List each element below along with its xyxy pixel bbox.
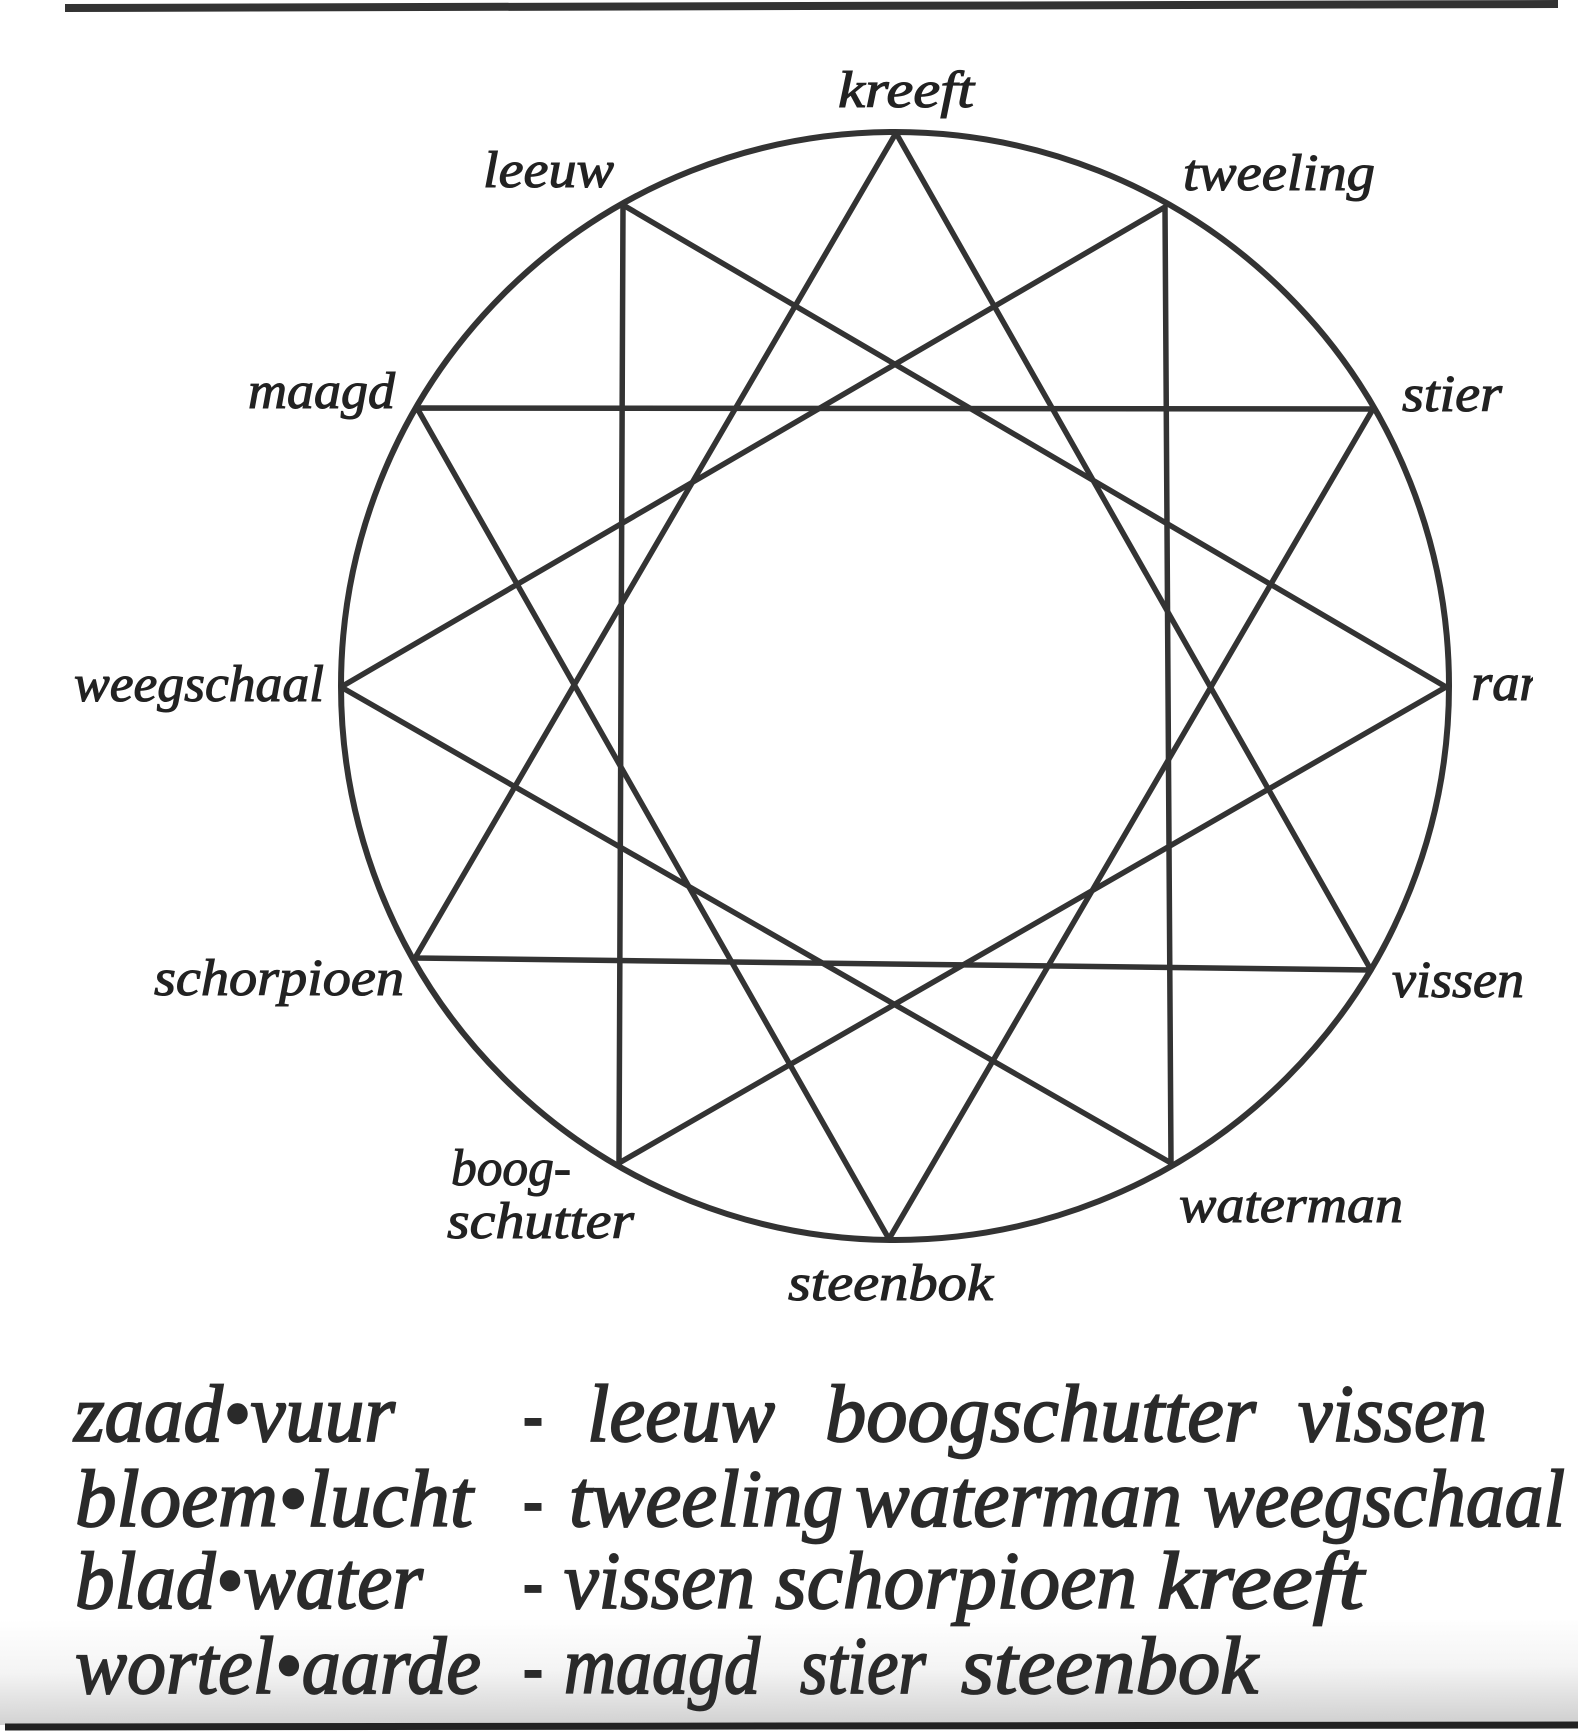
label: schorpioen: schorpioen	[154, 950, 404, 1007]
legend row: blad-water: vissen	[564, 1535, 755, 1626]
bottom rule	[5, 1725, 1578, 1727]
label: ram: ram	[1471, 655, 1559, 712]
legend row: wortel-aarde: stier	[800, 1620, 927, 1711]
legend row: zaad-vuur: boogschutter	[825, 1368, 1257, 1459]
legend row: wortel-aarde: -	[523, 1620, 543, 1711]
triangle: water signs	[415, 133, 1371, 970]
legend row: zaad-vuur	[73, 1368, 1487, 1459]
label: leeuw: leeuw	[483, 142, 614, 199]
legend row: blad-water: schorpioen	[775, 1535, 1137, 1626]
legend row: blad-water	[75, 1535, 1366, 1626]
paper shading at bottom	[0, 1620, 1578, 1725]
sign labels	[74, 62, 1559, 1312]
zodiac diagram	[341, 132, 1449, 1240]
legend row: blad-water: -	[523, 1535, 543, 1626]
legend row: wortel-aarde: wortel•aarde	[75, 1620, 481, 1711]
legend row: bloem-lucht: weegschaal	[1203, 1453, 1565, 1544]
label: stier: stier	[1402, 366, 1503, 423]
label: boogschutter: boog-	[451, 1140, 571, 1197]
legend row: bloem-lucht: -	[523, 1453, 543, 1544]
legend row: wortel-aarde: steenbok	[961, 1620, 1260, 1711]
label: weegschaal: weegschaal	[74, 656, 324, 713]
label: steenbok: steenbok	[788, 1255, 994, 1312]
legend	[73, 1368, 1565, 1711]
triangle: earth signs	[417, 408, 1373, 1239]
legend row: zaad-vuur: -	[523, 1368, 543, 1459]
legend row: wortel-aarde: maagd	[564, 1620, 761, 1711]
label: kreeft: kreeft	[838, 62, 976, 119]
label: boogschutter	[447, 1140, 635, 1250]
label: boogschutter: schutter	[447, 1193, 635, 1250]
label: tweeling: tweeling	[1183, 145, 1375, 202]
label: maagd: maagd	[248, 363, 396, 420]
legend row: bloem-lucht: bloem•lucht	[75, 1453, 475, 1544]
legend row: bloem-lucht: tweeling	[569, 1453, 843, 1544]
triangle: fire signs	[619, 205, 1446, 1163]
triangle: air signs	[341, 207, 1171, 1163]
legend row: zaad-vuur: leeuw	[587, 1368, 775, 1459]
outer circle	[341, 132, 1449, 1240]
legend row: bloem-lucht: waterman	[855, 1453, 1182, 1544]
top rule	[65, 4, 1558, 8]
legend row: blad-water: kreeft	[1157, 1535, 1366, 1626]
legend row: zaad-vuur: zaad•vuur	[73, 1368, 396, 1459]
legend row: zaad-vuur: vissen	[1298, 1368, 1487, 1459]
legend row: wortel-aarde	[75, 1620, 1260, 1711]
legend row: blad-water: blad•water	[75, 1535, 424, 1626]
label: waterman: waterman	[1179, 1177, 1403, 1234]
label: vissen: vissen	[1392, 952, 1524, 1009]
legend row: bloem-lucht	[75, 1453, 1565, 1544]
